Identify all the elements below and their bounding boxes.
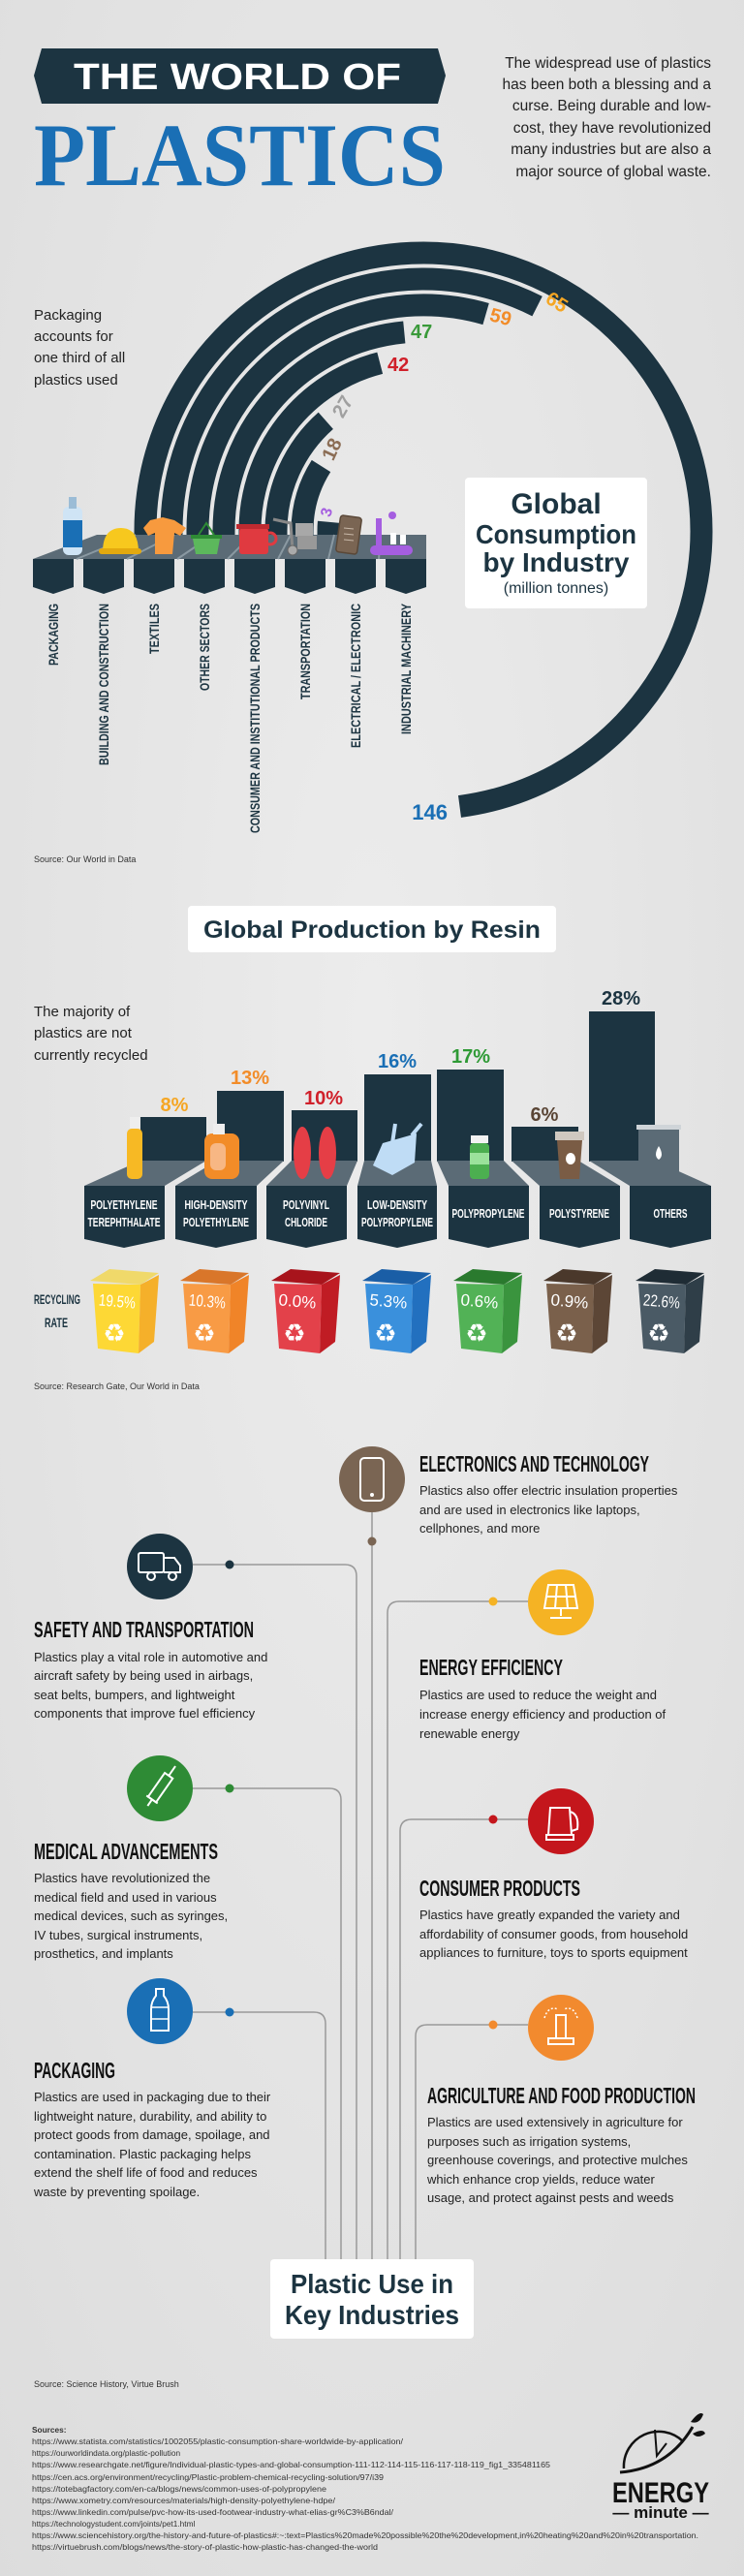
intro text: major source of global waste. — [515, 164, 711, 180]
intro text — [503, 55, 711, 180]
resin bar chart: POLYETHYLENE — [91, 1197, 158, 1212]
panel: safety and transportation: components that improve fuel efficiency — [34, 1706, 256, 1721]
panel: packaging: PACKAGING — [34, 2058, 115, 2083]
resin bar chart: POLYETHYLENE — [183, 1215, 249, 1229]
sources list: https://virtuebrush.com/blogs/news/the-story-of-plastic-how-plastic-has-changed-the-world — [32, 2542, 378, 2552]
resin bar chart: HIGH-DENSITY — [184, 1197, 248, 1212]
recycling bins: ♻ — [465, 1319, 488, 1349]
resin bar chart: 8% — [161, 1095, 189, 1116]
intro text: cost, they have revolutionized — [513, 120, 711, 137]
resin icons — [127, 1117, 681, 1179]
panel: energy efficiency: increase energy efficiency and production of — [419, 1707, 666, 1722]
resin bar chart: POLYVINYL — [283, 1197, 329, 1212]
icon: tablet — [335, 515, 362, 554]
panel: energy efficiency: Plastics are used to reduce the weight and — [419, 1688, 657, 1702]
icon: bottle circle — [127, 1978, 193, 2044]
panel: medical advancements: IV tubes, surgical instruments, — [34, 1928, 202, 1942]
sources list: https://technologystudent.com/joints/pet1.html — [32, 2519, 195, 2529]
panel: agriculture and food production: which enhance crop yields, reduce water — [426, 2172, 656, 2187]
panel: electronics and technology — [419, 1451, 678, 1536]
global consumption title box — [465, 478, 647, 608]
arc value labels: 146 — [412, 800, 448, 824]
icon: hard hat — [99, 528, 141, 554]
global consumption title box: (million tonnes) — [504, 580, 608, 597]
panel: consumer products: appliances to furniture, toys to sports equipment — [419, 1945, 688, 1960]
panel: safety and transportation — [34, 1617, 267, 1721]
panel: packaging: extend the shelf life of food and reduces — [34, 2165, 258, 2180]
recycling bins: ♻ — [555, 1319, 578, 1349]
connector dots — [225, 1536, 498, 2029]
panel: packaging: contamination. Plastic packaging helps — [34, 2147, 252, 2161]
panel: energy efficiency: ENERGY EFFICIENCY — [419, 1655, 563, 1680]
recycling rate label: RECYCLING — [34, 1291, 80, 1307]
sources list: https://www.xometry.com/resources/materials/high-density-polyethylene-hdpe/ — [32, 2496, 336, 2505]
icon: hand truck — [273, 519, 317, 555]
arc value labels: 47 — [411, 322, 432, 343]
resin bar chart: 28% — [602, 988, 640, 1009]
plastic use title box: Key Industries — [285, 2300, 459, 2330]
arc value labels: 59 — [487, 304, 513, 330]
icon: basket — [191, 523, 222, 554]
industry labels: OTHER SECTORS — [197, 604, 212, 691]
connector lines — [193, 1511, 528, 2259]
panel: agriculture and food production: Plastics are used extensively in agriculture for — [427, 2115, 683, 2129]
resin bar chart: LOW-DENSITY — [367, 1197, 427, 1212]
panel: safety and transportation: seat belts, bumpers, and lightweight — [34, 1688, 235, 1702]
panel: agriculture and food production: usage, and protect against pests and weeds — [427, 2190, 674, 2205]
resin bar chart: OTHERS — [653, 1206, 688, 1221]
panel: electronics and technology: cellphones, and more — [419, 1521, 540, 1536]
panel: packaging — [33, 2058, 271, 2199]
icon: shirt — [143, 517, 186, 554]
resin note: plastics are not — [34, 1025, 133, 1041]
logo: energy minute: ENERGY — [612, 2477, 709, 2509]
resin note: The majority of — [34, 1004, 131, 1020]
panel: medical advancements — [34, 1839, 228, 1961]
resin bar chart: 16% — [378, 1051, 417, 1072]
recycling rate label: RATE — [45, 1315, 68, 1330]
recycling bins: 5.3% — [369, 1290, 408, 1313]
icon: truck circle — [127, 1534, 193, 1599]
recycling bins — [90, 1269, 704, 1353]
industry labels: PACKAGING — [46, 604, 61, 666]
icon: solar panel circle — [528, 1569, 594, 1635]
icon: mug — [236, 524, 276, 554]
icon: HDPE jug — [204, 1124, 239, 1179]
arc value labels: 18 — [318, 435, 347, 464]
panel: consumer products: Plastics have greatly expanded the variety and — [419, 1908, 680, 1922]
recycling bins: ♻ — [283, 1319, 306, 1349]
title banner — [34, 48, 446, 104]
resin bar chart: POLYSTYRENE — [549, 1206, 609, 1221]
sources list: https://www.linkedin.com/pulse/pvc-how-its-used-footwear-industry-what-elias-gr%C3%B6ndal/ — [32, 2507, 394, 2517]
resin bar chart: 10% — [304, 1088, 343, 1109]
panel: safety and transportation: SAFETY AND TRANSPORTATION — [34, 1617, 254, 1642]
panel: medical advancements: medical devices, such as syringes, — [34, 1909, 228, 1923]
packaging note: accounts for — [34, 328, 113, 345]
source 3: Source: Science History, Virtue Brush — [34, 2379, 179, 2389]
icon: bucket — [636, 1125, 681, 1179]
arc chart: consumption by industry — [145, 253, 701, 807]
recycling rate label — [34, 1291, 80, 1330]
industry labels: ELECTRICAL / ELECTRONIC — [348, 604, 363, 748]
industry labels: TEXTILES — [146, 604, 162, 654]
source 1: Source: Our World in Data — [34, 854, 136, 864]
platform — [33, 535, 426, 594]
recycling bins: 22.6% — [642, 1290, 681, 1313]
panel: electronics and technology: Plastics also offer electric insulation properties — [419, 1483, 678, 1498]
panel: packaging: waste by preventing spoilage. — [33, 2185, 200, 2199]
panel: packaging: Plastics are used in packaging due to their — [34, 2090, 271, 2104]
icon: bottle — [63, 497, 82, 555]
recycling bins: ♻ — [193, 1319, 216, 1349]
industry labels: CONSUMER AND INSTITUTIONAL PRODUCTS — [247, 604, 263, 833]
panel: agriculture and food production: purposes such as irrigation systems, — [427, 2134, 631, 2149]
global consumption title box: Consumption — [476, 519, 636, 549]
resin bar chart — [84, 988, 711, 1248]
panel: safety and transportation: Plastics play a vital role in automotive and — [34, 1650, 267, 1664]
panel: medical advancements: MEDICAL ADVANCEMENTS — [34, 1839, 218, 1864]
intro text: many industries but are also a — [511, 141, 711, 158]
sources list: Sources: — [32, 2425, 67, 2435]
panel: safety and transportation: aircraft safety by being used in airbags, — [34, 1668, 253, 1683]
sources list: https://www.researchgate.net/figure/Individual-plastic-types-and-global-consumption-111-112-114-115-116-117-118-119_fig1_335481165 — [32, 2460, 550, 2469]
resin title box — [188, 906, 556, 952]
packaging note: Packaging — [34, 307, 102, 324]
resin bar chart: POLYPROPYLENE — [361, 1215, 433, 1229]
sources list: https://ourworldindata.org/plastic-pollution — [32, 2448, 181, 2458]
recycling bins: ♻ — [374, 1319, 397, 1349]
intro text: curse. Being durable and low- — [512, 98, 711, 114]
packaging note: plastics used — [34, 372, 118, 388]
panel: packaging: lightweight nature, durability, and ability to — [34, 2109, 266, 2124]
recycling bins: ♻ — [647, 1319, 670, 1349]
industry labels — [46, 603, 414, 833]
global consumption title box: Global — [511, 488, 602, 520]
panel: consumer products: CONSUMER PRODUCTS — [419, 1876, 580, 1901]
sources list: https://totebagfactory.com/en-ca/blogs/news/common-uses-of-polypropylene — [32, 2484, 326, 2494]
packaging note: one third of all — [34, 350, 125, 366]
resin bar chart: 17% — [451, 1046, 490, 1068]
title banner: THE WORLD OF — [74, 57, 401, 98]
arc value labels: 42 — [388, 355, 409, 376]
icon: coffee cup — [555, 1132, 584, 1179]
recycling bins: 0.9% — [550, 1290, 589, 1313]
intro text: has been both a blessing and a — [503, 77, 711, 93]
panel: agriculture and food production: greenhouse coverings, and protective mulches — [427, 2153, 688, 2167]
packaging note — [34, 307, 125, 388]
recycling bins: ♻ — [103, 1319, 126, 1349]
sources list: https://www.statista.com/statistics/1002055/plastic-consumption-share-worldwide-by-application/ — [32, 2436, 404, 2446]
resin bar chart: TEREPHTHALATE — [87, 1215, 161, 1229]
icon: PET bottle — [127, 1117, 142, 1179]
logo: energy minute — [612, 2413, 709, 2522]
industry icons — [63, 497, 413, 555]
panel: consumer products: affordability of consumer goods, from household — [419, 1927, 688, 1941]
arc value labels — [318, 288, 572, 824]
logo: energy minute: — minute — — [612, 2503, 709, 2522]
resin bar chart: CHLORIDE — [285, 1215, 327, 1229]
icon: robot arm — [370, 512, 413, 555]
intro text: The widespread use of plastics — [505, 55, 711, 72]
plastic use title box — [270, 2259, 474, 2339]
icon: sprinkler circle — [528, 1995, 594, 2061]
panel: medical advancements: prosthetics, and implants — [34, 1946, 173, 1961]
sources list: https://www.sciencehistory.org/the-history-and-future-of-plastics#:~:text=Plastics%20made%20possible%20the%20development,in%20heating%20and%20in%20transportation. — [32, 2530, 698, 2540]
arc value labels: 65 — [542, 288, 572, 318]
icon: smartphone circle — [339, 1446, 405, 1512]
panel: medical advancements: medical field and used in various — [34, 1890, 217, 1905]
resin note — [34, 1004, 148, 1064]
arc value labels: 27 — [328, 392, 357, 421]
arc value labels: 3 — [318, 506, 336, 518]
source 2: Source: Research Gate, Our World in Data — [34, 1381, 200, 1391]
industry labels: BUILDING AND CONSTRUCTION — [96, 604, 111, 765]
resin title box: Global Production by Resin — [203, 916, 541, 944]
panel: energy efficiency — [419, 1655, 666, 1741]
resin note: currently recycled — [34, 1047, 148, 1064]
panel: medical advancements: Plastics have revolutionized the — [34, 1871, 210, 1885]
global consumption title box: by Industry — [483, 547, 630, 577]
title: plastics: PLASTICS — [34, 106, 446, 204]
panel: consumer products — [419, 1876, 688, 1960]
recycling bins: 19.5% — [98, 1290, 137, 1313]
icon: plastic bag — [373, 1124, 421, 1175]
industry labels: TRANSPORTATION — [297, 604, 313, 699]
plastic use title box: Plastic Use in — [291, 2269, 453, 2299]
recycling bins: 0.0% — [278, 1290, 317, 1313]
resin bar chart: 6% — [531, 1104, 559, 1126]
icon: flip-flops — [294, 1127, 336, 1179]
resin bar chart: 13% — [231, 1068, 269, 1089]
sources list: https://cen.acs.org/environment/recycling/Plastic-problem-chemical-recycling-solution/97/i39 — [32, 2472, 384, 2482]
resin bar chart: POLYPROPYLENE — [451, 1206, 525, 1221]
recycling bins: 10.3% — [188, 1290, 227, 1313]
panel: energy efficiency: renewable energy — [419, 1726, 520, 1741]
panel: packaging: protect goods from damage, spoilage, and — [34, 2127, 270, 2142]
icon: syringe circle — [127, 1755, 193, 1821]
industry labels: INDUSTRIAL MACHINERY — [398, 603, 414, 734]
icon: jar — [470, 1135, 489, 1179]
icon: kettle circle — [528, 1788, 594, 1854]
recycling bins: 0.6% — [460, 1290, 499, 1313]
sources list — [32, 2425, 698, 2552]
panel: electronics and technology: and are used in electronics like laptops, — [419, 1503, 640, 1517]
panel: agriculture and food production — [426, 2083, 696, 2205]
